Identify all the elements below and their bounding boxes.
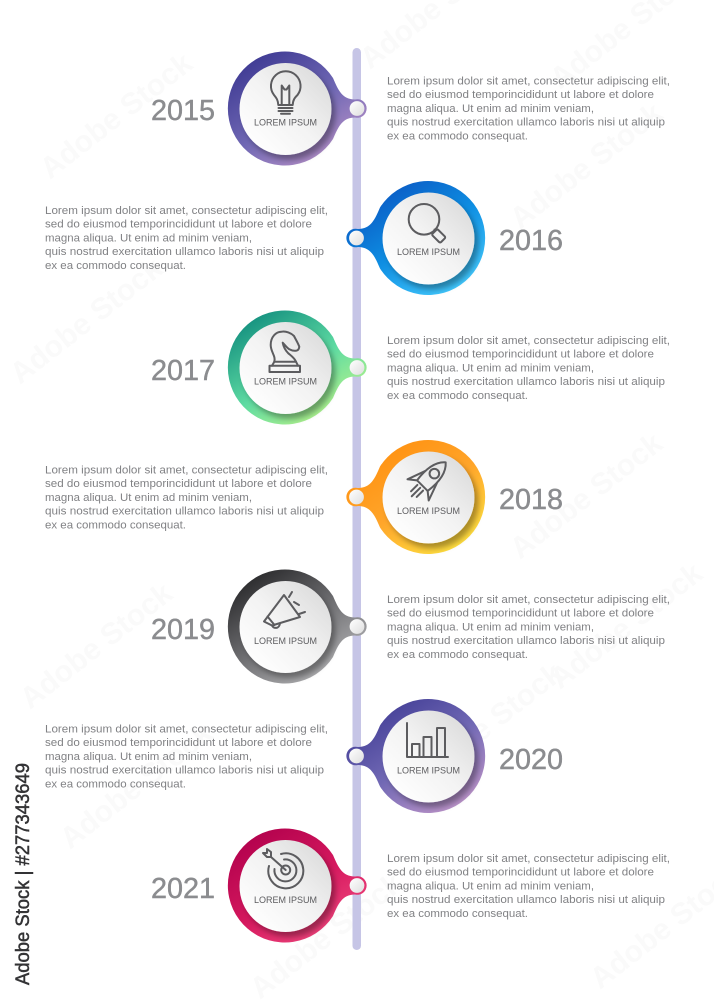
text block 2020: Lorem ipsum dolor sit amet, consectetur adipiscing elit,: [45, 724, 328, 736]
watermark: Adobe Stock: [54, 716, 219, 856]
text block 2016: quis nostrud exercitation ullamco laboris nisi ut aliquip: [45, 246, 324, 258]
text block 2018: sed do eiusmod temporincididunt ut labore et dolore: [45, 478, 312, 490]
text block 2018: [45, 464, 328, 531]
text block 2021: Lorem ipsum dolor sit amet, consectetur adipiscing elit,: [387, 853, 670, 865]
icon: light bulb: [271, 71, 301, 114]
watermark: Adobe Stock: [544, 556, 709, 696]
text block 2018: Lorem ipsum dolor sit amet, consectetur adipiscing elit,: [45, 464, 328, 476]
knob 2016: [349, 231, 364, 245]
text block 2020: [45, 724, 328, 790]
step 2015: [151, 51, 367, 165]
knob 2018: [349, 490, 364, 504]
step 2016: [346, 181, 563, 295]
step 2018: [346, 440, 563, 554]
watermark: Adobe Stock: [504, 426, 669, 566]
text block 2017: sed do eiusmod temporincididunt ut labore et dolore: [387, 349, 654, 361]
knob 2019: [350, 619, 364, 634]
text block 2019: ex ea commodo consequat.: [387, 649, 528, 661]
text block 2017: magna aliqua. Ut enim ad minim veniam,: [387, 362, 594, 374]
label 2016: LOREM IPSUM: [397, 246, 460, 257]
disc 2020: [382, 710, 474, 802]
text block 2015: quis nostrud exercitation ullamco laboris nisi ut aliquip: [387, 117, 665, 129]
icon: target with arrow: [263, 849, 303, 888]
text block 2020: quis nostrud exercitation ullamco laboris nisi ut aliquip: [45, 765, 324, 777]
watermark: Adobe Stock: [404, 656, 569, 796]
year 2017: 2017: [151, 355, 215, 387]
text block 2019: Lorem ipsum dolor sit amet, consectetur adipiscing elit,: [387, 594, 670, 606]
text block 2021: ex ea commodo consequat.: [387, 908, 528, 920]
text block 2016: [45, 205, 328, 272]
text block 2021: sed do eiusmod temporincididunt ut labore et dolore: [387, 867, 654, 879]
stock id vertical text: Adobe Stock | #277343649: [12, 763, 34, 985]
disc 2017: [240, 322, 332, 414]
year 2015: 2015: [151, 95, 215, 127]
text block 2015: magna aliqua. Ut enim ad minim veniam,: [387, 103, 594, 115]
watermark: Adobe Stock: [34, 46, 199, 186]
text block 2015: Lorem ipsum dolor sit amet, consectetur adipiscing elit,: [387, 76, 670, 88]
text block 2017: [387, 335, 670, 402]
label 2017: LOREM IPSUM: [254, 376, 317, 386]
watermark: Adobe Stock: [504, 96, 669, 236]
text block 2016: sed do eiusmod temporincididunt ut labore et dolore: [45, 219, 312, 231]
text block 2015: [387, 76, 670, 142]
text block 2020: magna aliqua. Ut enim ad minim veniam,: [45, 751, 252, 763]
text block 2016: magna aliqua. Ut enim ad minim veniam,: [45, 232, 252, 244]
text block 2019: quis nostrud exercitation ullamco laboris nisi ut aliquip: [387, 635, 665, 647]
step 2021: [151, 828, 367, 942]
label 2018: LOREM IPSUM: [397, 505, 460, 516]
text block 2020: ex ea commodo consequat.: [45, 778, 186, 790]
icon: megaphone: [264, 592, 305, 628]
ring 2015: [228, 51, 367, 165]
label 2019: LOREM IPSUM: [254, 635, 317, 646]
disc 2019: [240, 581, 332, 673]
disc 2021: [240, 840, 332, 932]
label 2021: LOREM IPSUM: [254, 894, 317, 905]
step 2019: [151, 570, 367, 684]
label 2020: LOREM IPSUM: [397, 764, 460, 776]
text block 2018: ex ea commodo consequat.: [45, 519, 186, 531]
ring 2020: [346, 699, 485, 813]
ring 2018: [346, 440, 485, 554]
ring 2021: [228, 828, 367, 942]
knob 2015: [350, 101, 364, 116]
disc 2015: [240, 63, 332, 155]
text block 2021: [387, 853, 670, 920]
text block 2021: quis nostrud exercitation ullamco laboris nisi ut aliquip: [387, 894, 665, 906]
ring 2017: [228, 310, 367, 424]
year 2020: 2020: [499, 744, 563, 776]
icon: bar chart: [407, 723, 448, 757]
year 2016: 2016: [499, 225, 563, 257]
text block 2019: sed do eiusmod temporincididunt ut labore et dolore: [387, 608, 654, 620]
disc 2018: [382, 452, 474, 544]
text block 2016: Lorem ipsum dolor sit amet, consectetur adipiscing elit,: [45, 205, 328, 217]
text block 2016: ex ea commodo consequat.: [45, 260, 186, 272]
year 2018: 2018: [499, 484, 563, 516]
year 2021: 2021: [151, 873, 215, 905]
text block 2017: quis nostrud exercitation ullamco laboris nisi ut aliquip: [387, 376, 665, 388]
text block 2019: magna aliqua. Ut enim ad minim veniam,: [387, 621, 594, 633]
icon: magnifier: [409, 204, 446, 243]
label 2015: LOREM IPSUM: [254, 116, 317, 128]
watermark: Adobe Stock: [4, 251, 169, 391]
text block 2018: magna aliqua. Ut enim ad minim veniam,: [45, 492, 252, 504]
year 2019: 2019: [151, 614, 215, 646]
ring 2016: [346, 181, 485, 295]
disc 2016: [382, 192, 474, 284]
knob 2021: [350, 878, 364, 893]
step 2017: [151, 310, 367, 424]
text block 2015: ex ea commodo consequat.: [387, 130, 528, 142]
icon: chess knight: [270, 332, 300, 372]
knob 2017: [350, 360, 364, 375]
ring 2019: [228, 570, 367, 684]
text block 2017: ex ea commodo consequat.: [387, 390, 528, 402]
timeline bar: [352, 48, 361, 950]
text block 2018: quis nostrud exercitation ullamco laboris nisi ut aliquip: [45, 506, 324, 518]
knob 2020: [349, 749, 364, 763]
text block 2019: [387, 594, 670, 661]
text block 2017: Lorem ipsum dolor sit amet, consectetur adipiscing elit,: [387, 335, 670, 347]
text block 2015: sed do eiusmod temporincididunt ut labore et dolore: [387, 89, 654, 101]
text block 2021: magna aliqua. Ut enim ad minim veniam,: [387, 880, 594, 892]
watermark: Adobe Stock: [14, 576, 179, 716]
text block 2020: sed do eiusmod temporincididunt ut labore et dolore: [45, 737, 312, 749]
icon: rocket: [401, 452, 456, 507]
step 2020: [346, 699, 563, 813]
